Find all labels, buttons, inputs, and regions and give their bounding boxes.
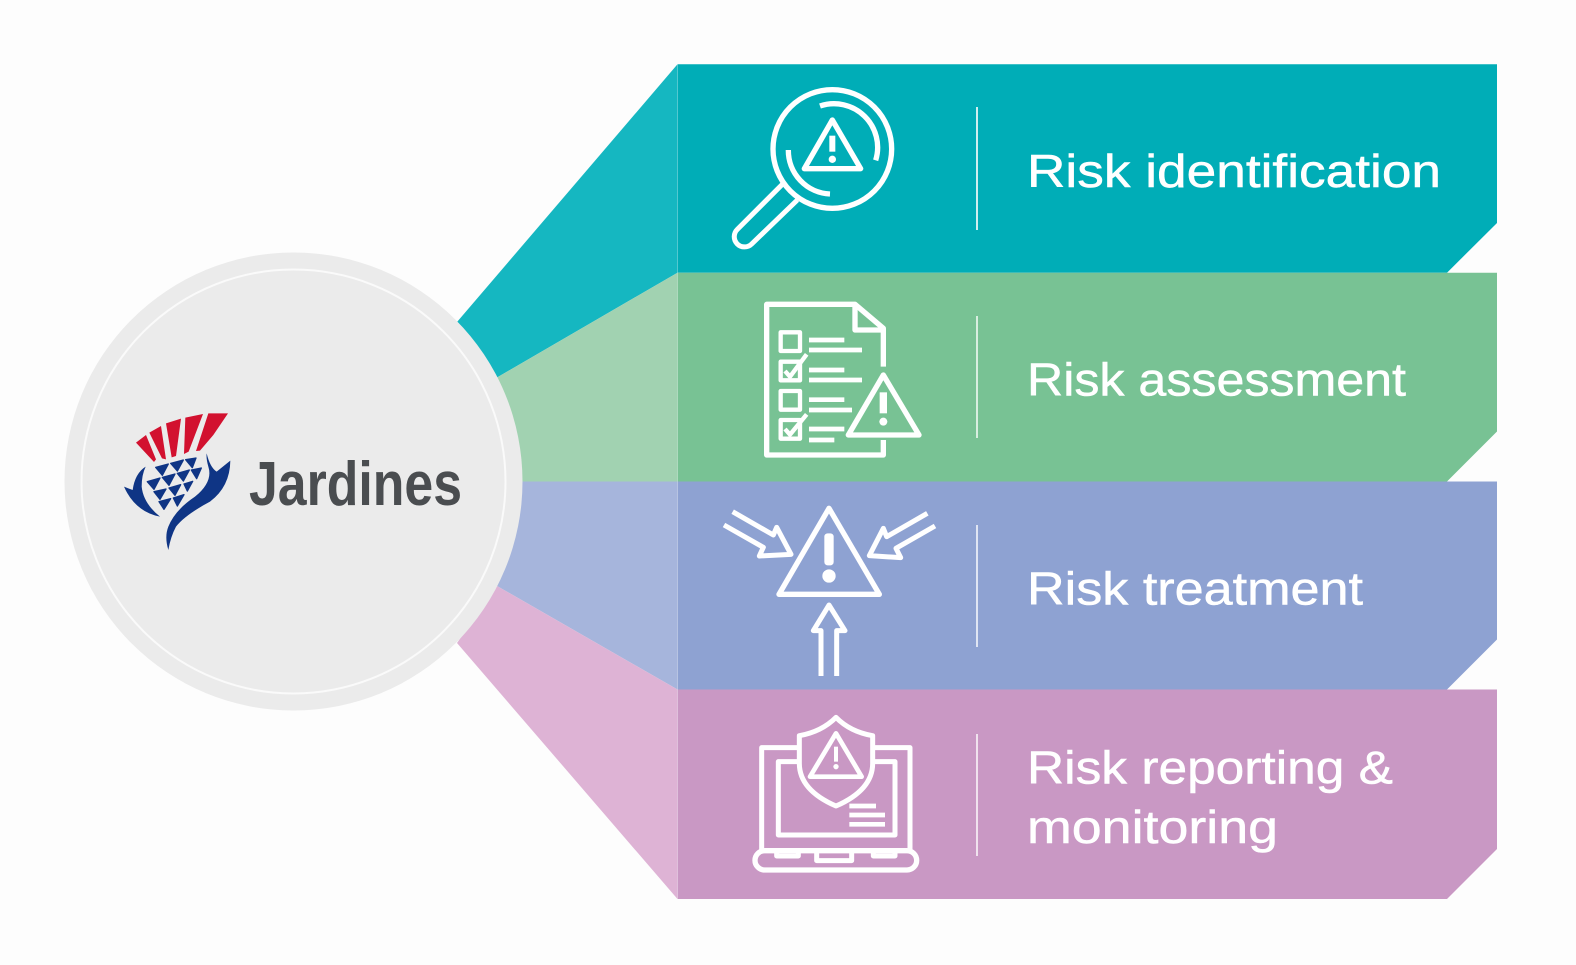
panel: risk reporting and monitoring bbox=[457, 586, 1497, 899]
icon: arrows pointing at warning bbox=[724, 508, 935, 676]
icon: magnifying glass with warning bbox=[734, 90, 892, 247]
icon: thistle bbox=[124, 413, 230, 550]
circle: outer disc bbox=[64, 252, 522, 710]
label: risk reporting and monitoring: monitoring bbox=[1027, 801, 1278, 853]
wing: green bbox=[497, 273, 678, 482]
panel: risk assessment bbox=[497, 273, 1497, 482]
band: blue bbox=[678, 482, 1497, 690]
panel: risk treatment bbox=[497, 482, 1497, 690]
band: pink bbox=[678, 690, 1497, 899]
icon: laptop with shield warning bbox=[755, 717, 917, 870]
divider bbox=[976, 525, 978, 647]
band: green bbox=[678, 273, 1497, 482]
wing: pink bbox=[457, 586, 678, 899]
divider bbox=[976, 107, 978, 230]
label: risk assessment: Risk assessment bbox=[1027, 354, 1406, 406]
logo: Jardines bbox=[124, 413, 462, 550]
wordmark: Jardines bbox=[249, 450, 462, 519]
wing: blue bbox=[497, 482, 678, 690]
wing: teal bbox=[457, 64, 678, 378]
label: risk identification: Risk identification bbox=[1027, 145, 1441, 197]
panel: risk identification bbox=[457, 64, 1497, 378]
label: risk treatment: Risk treatment bbox=[1027, 562, 1363, 614]
circle: inner ring bbox=[82, 270, 506, 694]
icon: checklist with warning bbox=[767, 304, 919, 455]
divider bbox=[976, 316, 978, 438]
band: teal bbox=[678, 64, 1497, 273]
central circle bbox=[64, 252, 522, 710]
label: risk reporting and monitoring: Risk reporting & bbox=[1027, 742, 1393, 794]
divider bbox=[976, 734, 978, 856]
